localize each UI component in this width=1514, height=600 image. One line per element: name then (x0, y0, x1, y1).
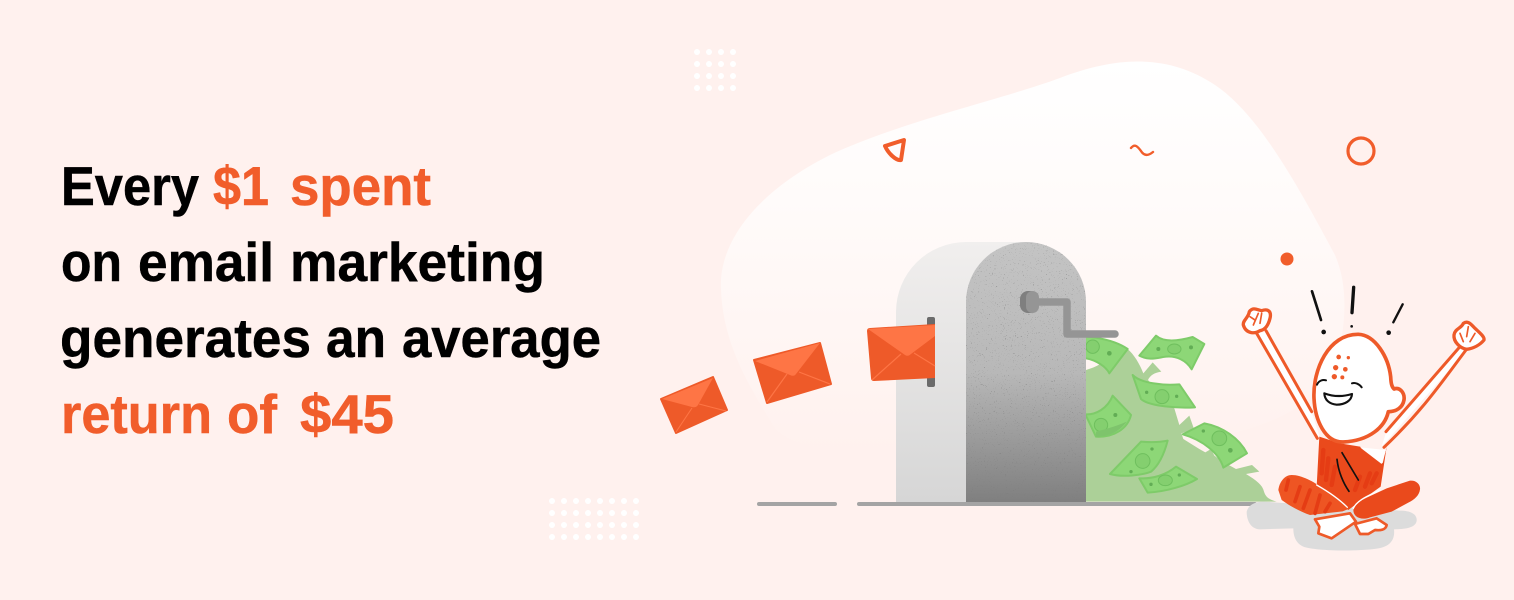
envelope 3 (867, 324, 935, 381)
dot grid: bottom (549, 498, 639, 540)
headline: marketing (290, 231, 545, 293)
headline: $45 (300, 383, 394, 445)
money pile (1079, 336, 1277, 502)
left foot (1315, 513, 1356, 538)
torso shading (1322, 450, 1377, 490)
headline: of (227, 383, 278, 445)
pile of cash (1086, 349, 1277, 502)
background blob (721, 62, 1344, 453)
headline: average (402, 307, 601, 369)
ground lines (757, 502, 1257, 506)
flying banknotes (1079, 336, 1247, 493)
headline: an (326, 307, 386, 369)
banknote 3 (1133, 375, 1195, 408)
crossed leg left (1278, 475, 1349, 515)
headline (60, 155, 601, 445)
head (1314, 334, 1404, 442)
dot grid: top (694, 49, 736, 91)
headline: generates (60, 307, 311, 369)
headline: Every (61, 155, 199, 217)
headline: on (61, 231, 122, 293)
banknote 6 (1139, 467, 1197, 493)
surprise marks (1312, 287, 1403, 335)
closed eyes (1317, 380, 1362, 387)
decorative triangle (885, 140, 904, 160)
right arm (1382, 347, 1467, 447)
mail slot (927, 317, 935, 387)
crank handle (1020, 291, 1115, 334)
leg highlights (1317, 485, 1380, 508)
machine side (896, 242, 1030, 503)
banknote 2 (1139, 336, 1204, 369)
left arm (1257, 331, 1320, 438)
headline: email (138, 231, 274, 293)
banknote 4 (1085, 396, 1131, 437)
banknote 5 (1110, 441, 1168, 476)
lower body (1278, 437, 1420, 538)
decorative squiggle (1131, 146, 1153, 155)
crossed leg right (1353, 481, 1420, 519)
banknote 1 (1086, 338, 1129, 374)
shirt folds (1337, 453, 1358, 491)
torso (1317, 437, 1387, 510)
infographic canvas (62, 49, 1486, 550)
machine grain (966, 242, 1086, 503)
right foot (1355, 518, 1387, 534)
decorative dot (1280, 252, 1294, 266)
headline: $1 (213, 155, 269, 217)
machine front (966, 242, 1086, 503)
headline: return (61, 383, 212, 445)
banknote 7 (1183, 423, 1247, 468)
machine (896, 242, 1115, 503)
left fist (1243, 309, 1270, 333)
envelope 1 (661, 377, 727, 433)
headline: spent (290, 155, 431, 217)
decorative circle (1348, 138, 1374, 164)
envelope 2 (754, 343, 831, 403)
smile (1324, 393, 1352, 405)
collar (1360, 447, 1386, 464)
freckles (1332, 355, 1350, 379)
ground shadow (1247, 502, 1417, 551)
cheering character (1243, 287, 1484, 551)
right fist (1454, 322, 1484, 349)
